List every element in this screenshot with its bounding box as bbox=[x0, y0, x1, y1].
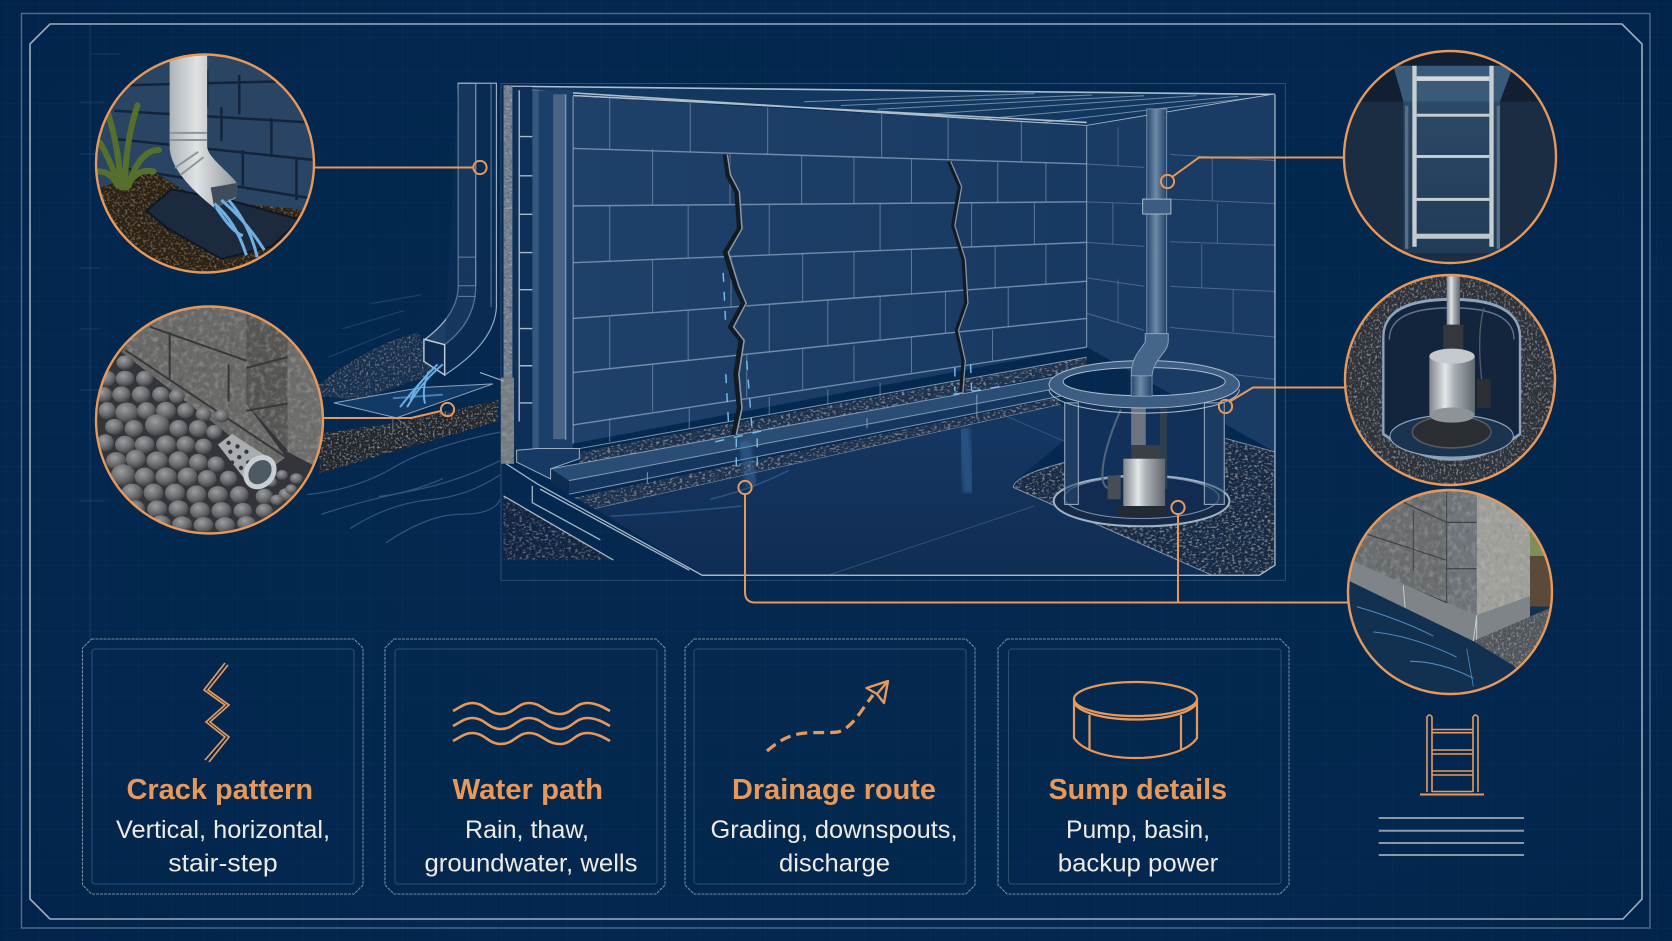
water spill bbox=[393, 364, 443, 407]
illustration: basement cutaway bbox=[480, 84, 1285, 580]
text: crack details bbox=[116, 816, 330, 878]
gravel around sump bbox=[1013, 438, 1275, 575]
text: water details: Rain, thaw, bbox=[465, 816, 589, 844]
illustration: exterior downspout and ground bbox=[307, 83, 500, 543]
heading: drainage route: Drainage route bbox=[732, 774, 936, 806]
back wall with block joints bbox=[573, 96, 1087, 443]
text: sump details: backup power bbox=[1058, 850, 1218, 878]
text: sump details bbox=[1058, 816, 1218, 878]
detail circle: ladder bbox=[1340, 47, 1560, 270]
node: sump pump bbox=[1219, 400, 1232, 413]
node: ladder bbox=[1161, 175, 1174, 188]
heading: water path: Water path bbox=[453, 774, 603, 806]
left pillar and strip bbox=[480, 85, 573, 464]
text: water details bbox=[424, 816, 638, 878]
floor bbox=[595, 405, 1212, 575]
decorative legend lines bbox=[1379, 818, 1524, 855]
node: wall crack bbox=[738, 481, 752, 494]
icon: sump basin bbox=[1074, 682, 1197, 758]
faint drafting frame bbox=[501, 84, 1285, 580]
crack right bbox=[949, 161, 1003, 394]
detail circle: downspout bbox=[93, 50, 321, 279]
icon: ladder bbox=[1420, 715, 1484, 794]
callout leaders bbox=[315, 158, 1348, 602]
card: drainage route bbox=[685, 639, 975, 894]
detail circle: wall base and water bbox=[1346, 488, 1554, 696]
card: sump details bbox=[998, 639, 1289, 894]
icon: water waves bbox=[453, 703, 610, 744]
leader: downspout bbox=[315, 166, 473, 168]
icon: crack bbox=[204, 663, 229, 762]
text: drainage details bbox=[710, 816, 958, 878]
card: water path bbox=[385, 639, 665, 894]
ceiling bbox=[506, 86, 1275, 126]
detail circle: sump pump bbox=[1340, 270, 1560, 493]
text: sump details: Pump, basin, bbox=[1066, 816, 1210, 844]
text: drainage details: Grading, downspouts, bbox=[710, 816, 958, 844]
text: crack details: stair-step bbox=[168, 850, 278, 878]
card: crack pattern bbox=[82, 639, 363, 894]
illustration outline bbox=[702, 94, 1275, 575]
icon: dashed arrow bbox=[767, 681, 888, 751]
crack left bbox=[715, 154, 773, 472]
curbs and gravel channels bbox=[517, 357, 1087, 509]
heading: sump details: Sump details bbox=[1049, 774, 1227, 806]
leader: drain bbox=[323, 411, 441, 418]
discharge pipe bbox=[1131, 109, 1171, 396]
lower left footing lines bbox=[504, 464, 847, 575]
leader: sump pump bbox=[1229, 388, 1345, 402]
node: sump basin bbox=[1171, 501, 1185, 514]
text: water details: groundwater, wells bbox=[424, 850, 638, 878]
node: drain bbox=[441, 403, 454, 416]
leader: ladder bbox=[1172, 158, 1344, 177]
submersible pump bbox=[1102, 408, 1167, 517]
text: crack details: Vertical, horizontal, bbox=[116, 816, 330, 844]
heading: crack pattern: Crack pattern bbox=[126, 774, 313, 806]
sump basin bbox=[1049, 361, 1239, 526]
downspout bbox=[424, 83, 496, 375]
node: downspout bbox=[473, 161, 487, 174]
leader: wall base bbox=[745, 494, 1348, 602]
text: drainage details: discharge bbox=[779, 850, 890, 878]
right wall bbox=[1087, 94, 1275, 452]
detail circle: gravel and perforated drain bbox=[93, 304, 329, 539]
